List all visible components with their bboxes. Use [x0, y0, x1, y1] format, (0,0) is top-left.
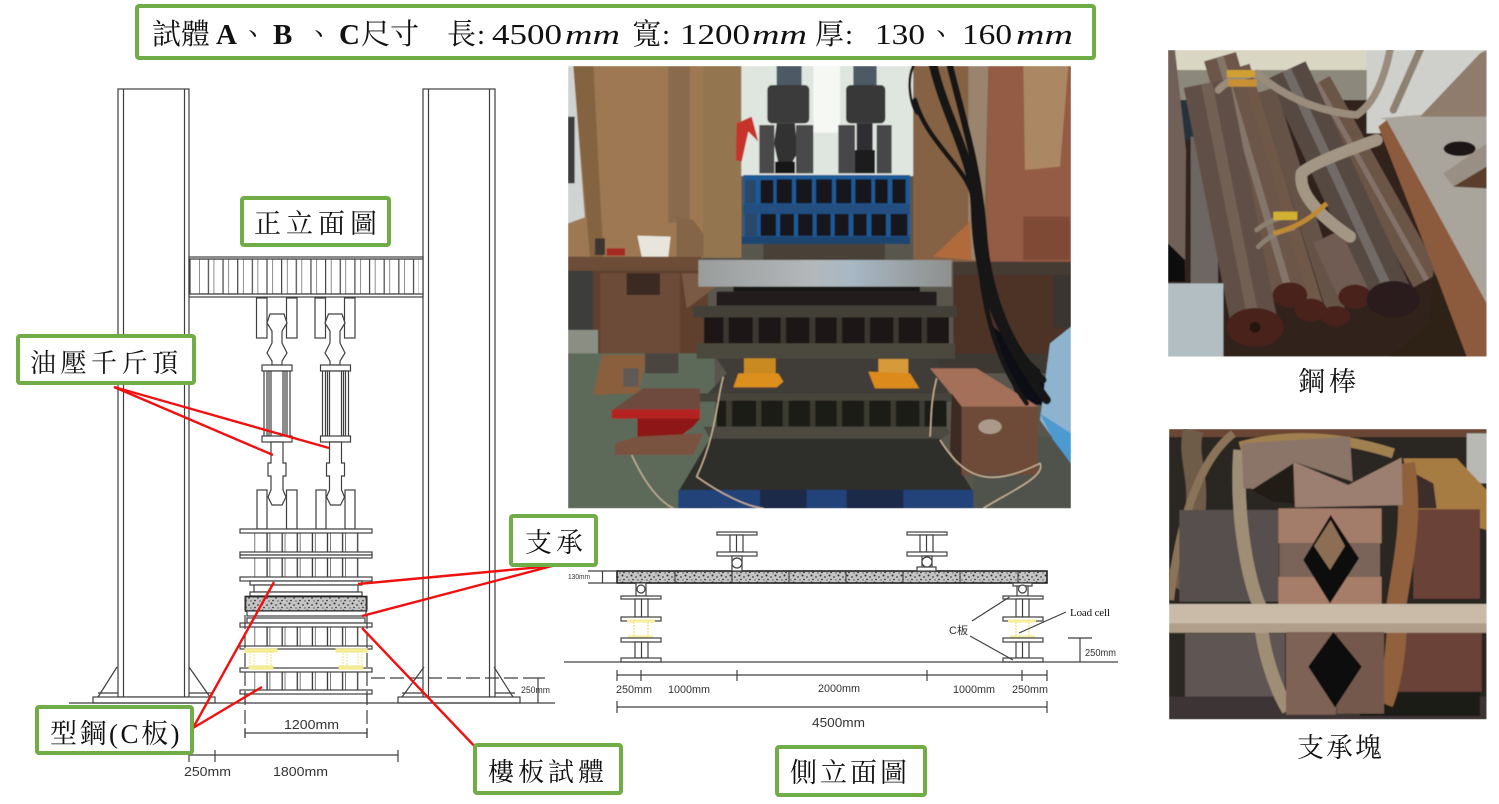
right column: [398, 89, 520, 703]
load cells: [245, 649, 367, 669]
dimension row: [616, 670, 1048, 696]
title: specimen dimensions: :: [477, 19, 485, 51]
rod ends: [1226, 308, 1284, 347]
leader lines: hydraulic jacks: [114, 387, 329, 455]
top blocks: [1242, 436, 1354, 490]
tarp: [1039, 326, 1071, 436]
label: section steel C plate: 型鋼(C板): [50, 719, 182, 749]
bottom table: [678, 439, 973, 492]
label: side elevation: 側立面圖: [790, 758, 910, 788]
lower block: [1286, 632, 1336, 715]
floor: [568, 353, 715, 508]
jack left: [256, 298, 297, 529]
title: specimen dimensions: mm: [752, 19, 807, 51]
lower table top: [700, 359, 952, 402]
jack right: [315, 298, 355, 529]
photo: steel rods: [1168, 50, 1487, 357]
load cells orange: [743, 358, 776, 374]
title: specimen dimensions: 、: [305, 19, 334, 51]
caption: bearing blocks: 支承塊: [1297, 733, 1384, 763]
dimension row: 2000mm: [818, 683, 860, 695]
right shelf: [953, 262, 1071, 275]
annotation: Load cell: [1019, 607, 1110, 633]
front elevation drawing: [69, 89, 555, 779]
title: specimen dimensions: :: [845, 19, 853, 51]
straps: [1239, 450, 1288, 710]
floor slab section: [246, 596, 366, 611]
left tube and rods: [1168, 50, 1186, 282]
label: front elevation: 正立面圖: [254, 209, 382, 239]
sensor wires: [632, 377, 1041, 508]
left column: [568, 66, 741, 258]
leader lines: C plates: [193, 582, 274, 728]
title: specimen dimensions: 尺寸: [361, 18, 419, 51]
leader lines: bearings: [358, 566, 552, 616]
photo: test setup: [568, 66, 1071, 508]
left support: [621, 583, 661, 662]
title: specimen dimensions: 、: [927, 19, 956, 51]
right support: [1003, 583, 1043, 662]
label: section steel C plate: [37, 707, 192, 753]
title: specimen dimensions: 寬: [632, 18, 661, 51]
left column: [93, 89, 215, 703]
red I beam: [613, 388, 700, 409]
base plate left: [593, 355, 647, 395]
title: specimen dimensions: B: [273, 19, 292, 51]
title: specimen dimensions: 、: [239, 19, 268, 51]
wood: [1403, 458, 1487, 530]
title: specimen dimensions: 長: [447, 19, 476, 51]
dimension: 1200mm: 1200mm: [284, 717, 339, 732]
annotation: C板: [949, 597, 1013, 660]
title: specimen dimensions: 4500: [492, 19, 562, 51]
title: specimen dimensions: 厚: [815, 19, 844, 51]
dimension: 250mm and 1800mm: 250mm: [184, 764, 231, 779]
cables: [910, 66, 1047, 403]
label: bearing: 支承: [525, 528, 587, 558]
jack heads: [767, 85, 809, 123]
slab: [617, 571, 1047, 583]
dimension: slab thickness 130mm: 130mm: [568, 574, 590, 581]
title: specimen dimensions: :: [662, 19, 670, 51]
upper brown beam: [733, 287, 920, 292]
title: specimen dimensions: A: [216, 19, 237, 51]
center block: [1278, 508, 1382, 543]
side plates: [1179, 510, 1279, 602]
left shelf: [568, 257, 701, 271]
title: specimen dimensions: mm: [565, 19, 620, 51]
cylinders above jack: [777, 66, 802, 89]
white block: [1168, 283, 1223, 357]
title: specimen dimensions: 130: [875, 19, 925, 51]
dimension: 250mm and 1800mm: [184, 750, 398, 779]
dimension: 1200mm: [245, 717, 367, 738]
dimension: 250mm height: 250mm: [521, 685, 550, 695]
dimension: 250mm and 1800mm: 1800mm: [273, 764, 328, 779]
title: specimen dimensions: 1200: [680, 19, 750, 51]
label: side elevation: [777, 747, 925, 795]
lower beam: [717, 400, 947, 428]
photo: bearing blocks: [1169, 429, 1487, 719]
straps: [1218, 50, 1420, 247]
copper block right: [930, 368, 1038, 407]
cross beam: [189, 257, 423, 297]
red clamp: [736, 117, 758, 162]
dimension: slab thickness 130mm: [568, 571, 617, 583]
horizontal bar: [1169, 604, 1487, 633]
title: specimen dimensions: C: [339, 19, 360, 51]
dimension row: 1000mm: [953, 684, 995, 696]
label: floor slab specimen: 樓板試體: [488, 758, 608, 787]
left strap: [1173, 430, 1196, 587]
blue loading beam: [743, 175, 910, 243]
label: front elevation: [242, 198, 389, 245]
dimension: 4500mm: [617, 701, 1047, 730]
label: hydraulic jack: 油壓千斤頂: [30, 349, 183, 378]
dimension row: 250mm: [616, 684, 652, 696]
title: specimen dimensions: mm: [1016, 19, 1073, 51]
dimension row: 1000mm: [668, 684, 710, 696]
right column: [912, 66, 989, 263]
title: specimen dimensions: [137, 6, 1094, 58]
silver plate: [698, 260, 952, 287]
annotation: C板: C板: [949, 623, 968, 637]
leader line: floor slab specimen: [362, 628, 481, 753]
label: hydraulic jack: [18, 336, 194, 383]
annotation: Load cell: Load cell: [1070, 607, 1110, 619]
top loading beams: [717, 532, 947, 571]
hydraulic jacks: [256, 298, 355, 529]
steel plate at right: [1380, 115, 1487, 307]
steel C plate stack with slab: [240, 529, 372, 703]
title: specimen dimensions: 試體: [152, 18, 210, 51]
label: bearing: [511, 516, 596, 565]
caption: steel rods: 鋼棒: [1298, 367, 1360, 397]
dimension: 250mm support height: [1068, 638, 1116, 662]
dimension: 4500mm: 4500mm: [812, 715, 865, 730]
label: floor slab specimen: [475, 745, 621, 793]
dimension: 250mm support height: 250mm: [1085, 648, 1116, 659]
title: specimen dimensions: 160: [962, 19, 1012, 51]
dimension row: 250mm: [1012, 684, 1048, 696]
bucket: [637, 236, 671, 257]
side elevation drawing: [564, 532, 1118, 730]
